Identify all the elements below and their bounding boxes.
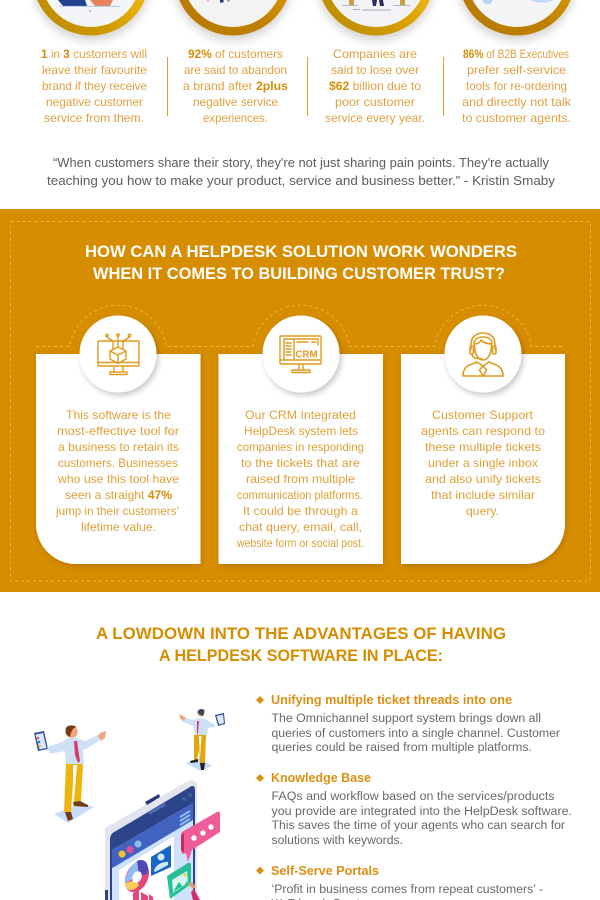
quote [47, 155, 556, 188]
stat text: 86% of B2B executives: 86% of B2B Executives [463, 47, 569, 61]
stat text: 86% of B2B executives [462, 47, 572, 125]
list item: self-serve portals: Self-Serve Portals [271, 864, 379, 878]
card 2 text: Our CRM Integrated [245, 408, 356, 422]
card 2 text: companies in responding [237, 440, 364, 454]
list item: knowledge base: Knowledge Base [271, 771, 371, 785]
card 2 text: communication platforms. [237, 488, 363, 502]
card 1 text: a business to retain its [58, 440, 179, 454]
stat text: 1 in 3 customers: 1 in 3 customers will [41, 47, 147, 61]
card 1 text: most-effective tool for [57, 424, 179, 438]
card 1 text: seen a straight 47% [65, 488, 172, 502]
stat text: 92% of customers: experiences. [203, 111, 268, 125]
card 1 text [55, 408, 179, 534]
card 3 text: these multiple tickets [425, 440, 541, 454]
stat text: $62 billion [325, 47, 425, 125]
card 3 text: and also unify tickets [425, 472, 541, 486]
card 1 text: customers. Businesses [58, 456, 178, 470]
list item: self-serve portals: ‘Profit in business comes from repeat customers’ - [272, 884, 543, 896]
stat text: 92% of customers [183, 47, 288, 125]
panel heading: HOW CAN A HELPDESK SOLUTION WORK WONDERS [85, 243, 517, 261]
list item: knowledge base: you provide are integrated into the HelpDesk software. [272, 806, 572, 818]
card 2 text: to the tickets that are [241, 456, 360, 470]
illustration: small businessman with tablet [179, 709, 225, 771]
card 3 text [421, 408, 545, 518]
stat text: 92% of customers: 92% of customers [188, 47, 283, 61]
list item: unifying ticket threads: The Omnichannel support system brings down all [272, 713, 541, 725]
stat text: 1 in 3 customers [41, 47, 147, 125]
stat text: 1 in 3 customers: negative customer [46, 95, 143, 109]
card 3 text: that include similar [431, 488, 535, 502]
card 3 text: Customer Support [432, 408, 534, 422]
list item: unifying ticket threads: queries could be raised from multiple platforms. [272, 742, 532, 754]
card 3 [401, 316, 565, 564]
list item: unifying ticket threads [256, 693, 560, 754]
card 3 text: agents can respond to [421, 424, 545, 438]
medallion: abandoning brand [174, 0, 292, 36]
card 2 text [236, 408, 364, 550]
medallion: self-service tools [458, 0, 576, 36]
list item: knowledge base [256, 771, 572, 847]
list item: knowledge base: solutions with keywords. [272, 835, 403, 847]
stat text: 1 in 3 customers: leave their favourite [42, 63, 147, 77]
list item: knowledge base: FAQs and workflow based on the services/products [272, 791, 555, 803]
stat text: 1 in 3 customers: brand if they receive [42, 79, 147, 93]
stat text: 86% of B2B executives: and directly not talk [462, 95, 572, 109]
illustration: tablet dashboard [105, 780, 220, 900]
heading: advantages [96, 625, 506, 665]
list item: self-serve portals [256, 864, 543, 900]
stat text: $62 billion: Companies are [333, 47, 417, 61]
stat text: 1 in 3 customers: service from them. [44, 111, 144, 125]
illustration: large businessman with tablet [34, 725, 106, 823]
icon: CRM monitor: CRM [296, 348, 318, 360]
stat text: 86% of B2B executives: tools for re-ordering [466, 79, 567, 93]
icon: support agent with headset [463, 333, 503, 376]
quote: “When customers share their story, they're not just sharing pain points. They're actually [53, 155, 549, 170]
icon: CRM monitor [280, 336, 321, 372]
card 1 text: jump in their customers’ [55, 504, 179, 518]
quote: teaching you how to make your product, service and business better.” - Kristin Smaby [47, 173, 556, 188]
panel heading: WHEN IT COMES TO BUILDING CUSTOMER TRUST? [93, 265, 505, 283]
heading: advantages: A LOWDOWN INTO THE ADVANTAGES OF HAVING [96, 625, 506, 643]
list item: knowledge base: This saves the time of your agents who can search for [272, 820, 565, 832]
medallion: billions lost [318, 0, 434, 36]
stat text: 86% of B2B executives: to customer agents. [462, 111, 571, 125]
card 1 [36, 316, 200, 564]
card 2 text: chat query, email, call, [239, 520, 362, 534]
icon: monitor with cube [98, 334, 139, 374]
heading: advantages: A HELPDESK SOFTWARE IN PLACE: [159, 647, 443, 665]
medallion: customers leaving brand [32, 0, 150, 36]
card 2 text: It could be through a [243, 504, 358, 518]
card 3 text: query. [466, 504, 499, 518]
card 2 [218, 316, 383, 564]
card 2 text: HelpDesk system lets [244, 424, 358, 438]
stat text: 92% of customers: a brand after 2plus [183, 79, 288, 93]
stat text: $62 billion: poor customer [335, 95, 415, 109]
list item: unifying ticket threads: queries of customers into a single channel. Customer [272, 728, 560, 740]
list item: unifying ticket threads: Unifying multiple ticket threads into one [271, 693, 512, 707]
card 3 text: under a single inbox [428, 456, 538, 470]
card 2 text: raised from multiple [246, 472, 355, 486]
panel heading [85, 243, 517, 283]
stat text: 86% of B2B executives: prefer self-service [467, 63, 566, 77]
card 2 text: website form or social post. [236, 536, 364, 550]
stat text: 92% of customers: are said to abandon [184, 63, 287, 77]
panel: helpdesk solution [0, 209, 600, 592]
stat text: $62 billion: service every year. [325, 111, 425, 125]
card 1 text: This software is the [66, 408, 171, 422]
card 1 text: who use this tool have [57, 472, 179, 486]
stat text: $62 billion: $62 billion due to [329, 79, 421, 93]
stat text: 92% of customers: negative service [193, 95, 278, 109]
card 1 text: lifetime value. [81, 520, 156, 534]
stat text: $62 billion: said to lose over [331, 63, 419, 77]
